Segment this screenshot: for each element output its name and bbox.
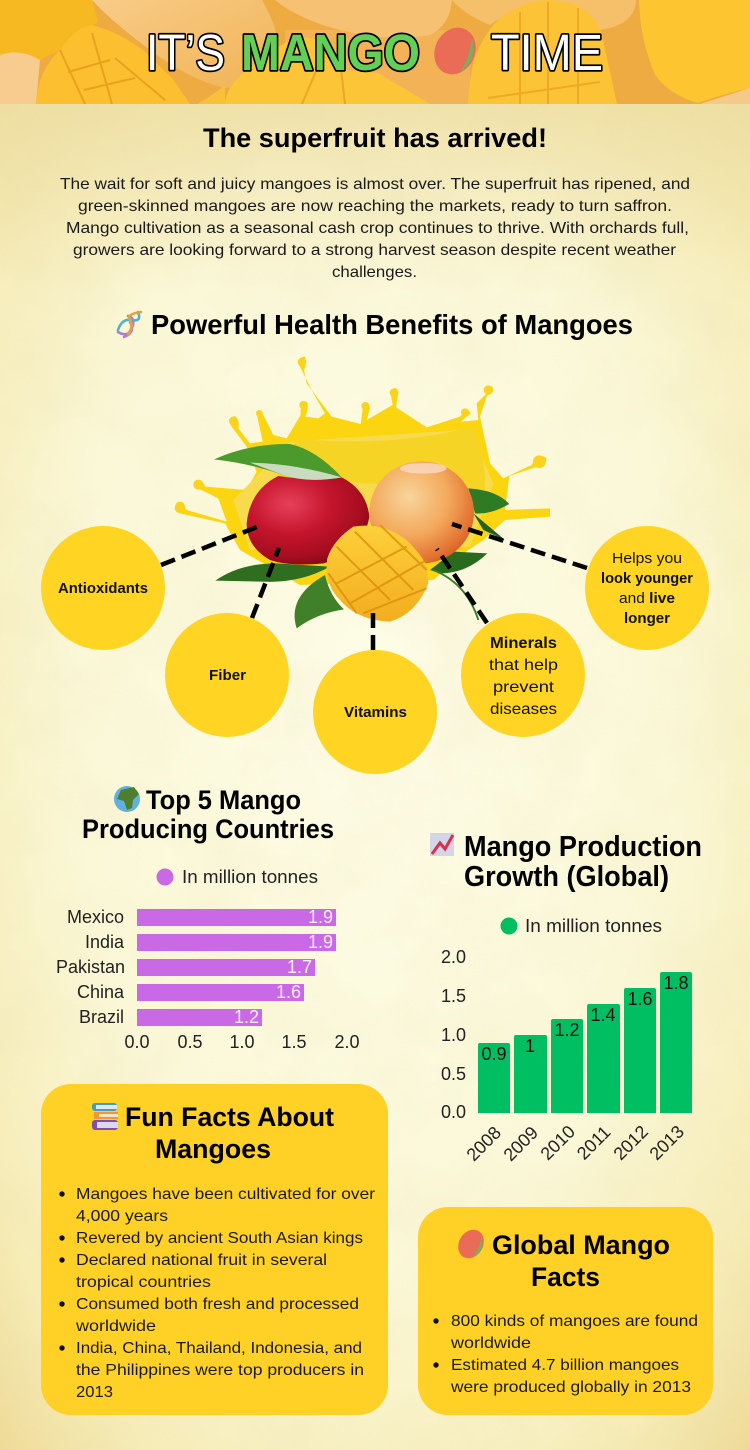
bar chart: top producers: 1.9 xyxy=(308,907,333,927)
bar chart: global growth: 2011 xyxy=(573,1122,615,1164)
bar chart: global growth: 1.2 xyxy=(554,1020,580,1040)
circle: minerals: prevent xyxy=(493,679,555,696)
intro paragraph: The wait for soft and juicy mangoes is almost over. The superfruit has ripened, and xyxy=(60,176,690,193)
cut mango xyxy=(327,525,428,622)
circle: vitamins xyxy=(313,650,437,774)
list: global facts: 800 kinds of mangoes are found xyxy=(451,1313,698,1330)
heading: global facts: Global Mango xyxy=(492,1230,670,1260)
circle: antioxidants: Antioxidants xyxy=(58,581,148,597)
bar chart: global growth: 0.5 xyxy=(441,1064,466,1084)
leaf: bottom xyxy=(295,575,344,628)
bar chart: top producers: 1.2 xyxy=(234,1007,259,1027)
title: MANGO xyxy=(241,24,420,81)
list: global facts: worldwide xyxy=(450,1335,531,1352)
intro paragraph: challenges. xyxy=(332,264,417,281)
heading: top 5 countries: Top 5 Mango xyxy=(146,785,301,815)
circle: look younger: look younger xyxy=(601,571,693,587)
list: fun facts: 4,000 years xyxy=(76,1208,168,1225)
list: global facts xyxy=(433,1313,698,1396)
circle: minerals: that help xyxy=(489,657,558,674)
list: global facts: Estimated 4.7 billion mangoes xyxy=(451,1357,679,1374)
bar chart: global growth: 0.9 xyxy=(481,1044,507,1064)
list: fun facts xyxy=(59,1186,376,1401)
list: fun facts: India, China, Thailand, Indonesia, and xyxy=(76,1340,362,1357)
bar chart: top producers: 0.0 xyxy=(124,1032,150,1052)
bar chart: top producers: 2.0 xyxy=(334,1032,360,1052)
bar chart: top producers: 0.5 xyxy=(177,1032,203,1052)
header banner: mango photo xyxy=(0,0,750,104)
icon: heading mango xyxy=(453,1225,489,1263)
circle: minerals: Minerals xyxy=(490,635,557,652)
legend: growth: In million tonnes xyxy=(525,916,662,936)
leaf: top xyxy=(214,444,342,480)
panel: fun facts xyxy=(41,1084,388,1415)
bar chart: global growth: 1.6 xyxy=(627,989,653,1009)
leaf: lower left xyxy=(215,563,330,582)
bar chart: top producers: 1.7 xyxy=(287,957,312,977)
bar chart: global growth: 2013 xyxy=(646,1122,688,1164)
bar chart: global growth: 2009 xyxy=(500,1123,542,1165)
circle: antioxidants xyxy=(41,526,165,650)
bar chart: global growth: 2012 xyxy=(610,1122,652,1164)
heading: fun facts xyxy=(125,1102,334,1164)
list: fun facts: Declared national fruit in several xyxy=(76,1252,327,1269)
leaf: right xyxy=(468,488,509,514)
circle: minerals: diseases xyxy=(490,701,557,718)
title: TIME xyxy=(491,24,603,81)
icon: DNA xyxy=(118,312,141,337)
list: fun facts: Consumed both fresh and processed xyxy=(76,1296,359,1313)
orange mango xyxy=(369,461,474,563)
bar chart: top producers xyxy=(56,907,360,1052)
title: IT’S xyxy=(146,24,225,81)
icon: books xyxy=(92,1103,118,1130)
bar chart: global growth: 2.0 xyxy=(441,947,466,967)
heading: top 5 countries xyxy=(82,785,334,844)
circle: fiber xyxy=(165,613,289,737)
title xyxy=(146,24,603,81)
intro paragraph: green-skinned mangoes are now reaching the markets, ready to turn saffron. xyxy=(78,198,672,215)
heading: production growth xyxy=(464,831,702,893)
list: fun facts: 2013 xyxy=(76,1384,113,1401)
heading: top 5 countries: Producing Countries xyxy=(82,814,334,844)
bar chart: top producers: 1.9 xyxy=(308,932,333,952)
illustration: mangoes and juice splash xyxy=(175,357,550,628)
list: fun facts: Revered by ancient South Asian kings xyxy=(76,1230,363,1247)
circle: look younger: and live xyxy=(619,591,675,607)
bar chart: global growth: 1.5 xyxy=(441,986,466,1006)
circle: look younger xyxy=(585,526,709,650)
intro paragraph: growers are looking forward to a strong harvest season despite recent weather xyxy=(73,242,677,259)
circle: look younger: Helps you xyxy=(612,551,682,567)
circle: vitamins: Vitamins xyxy=(344,705,407,721)
heading: global facts: Facts xyxy=(531,1262,600,1292)
list: fun facts: the Philippines were top producers in xyxy=(76,1362,364,1379)
connector lines xyxy=(161,524,587,650)
heading: production growth: Growth (Global) xyxy=(464,861,669,893)
bar chart: global growth: 1.4 xyxy=(590,1005,616,1025)
bar chart: global growth: 2010 xyxy=(537,1122,579,1164)
bar chart: top producers: 1.5 xyxy=(281,1032,307,1052)
list: global facts: were produced globally in 2013 xyxy=(450,1379,691,1396)
heading: production growth: Mango Production xyxy=(464,831,702,863)
panel: global facts xyxy=(418,1207,713,1415)
bar chart: global growth: 1.8 xyxy=(663,973,689,993)
bar chart: top producers: China xyxy=(77,982,125,1002)
bar chart: global growth: 2008 xyxy=(463,1123,505,1165)
intro paragraph: Mango cultivation as a seasonal cash crop continues to thrive. With orchards full, xyxy=(66,220,689,237)
circle: fiber: Fiber xyxy=(209,668,246,684)
list: fun facts: Mangoes have been cultivated for over xyxy=(76,1186,376,1203)
legend: countries: In million tonnes xyxy=(182,867,318,887)
heading: fun facts: Fun Facts About xyxy=(125,1102,334,1132)
circle: look younger: longer xyxy=(624,611,670,627)
bar chart: top producers: Pakistan xyxy=(56,957,125,977)
red mango xyxy=(247,476,369,564)
bar chart: top producers: Brazil xyxy=(79,1007,124,1027)
bar chart: global growth: 0.0 xyxy=(441,1102,466,1122)
icon: chart xyxy=(430,833,454,856)
list: fun facts: tropical countries xyxy=(76,1274,211,1291)
heading: health benefits: Powerful Health Benefits of Mangoes xyxy=(151,309,633,340)
heading: fun facts: Mangoes xyxy=(155,1134,271,1164)
icon: title mango xyxy=(427,21,483,81)
bar chart: global growth xyxy=(441,947,692,1165)
heading: the superfruit has arrived: The superfruit has arrived! xyxy=(203,123,547,153)
intro paragraph xyxy=(60,176,690,281)
icon: globe xyxy=(114,786,140,812)
bar chart: top producers: 1.6 xyxy=(276,982,301,1002)
bar chart: global growth: 1.0 xyxy=(441,1025,466,1045)
bar chart: top producers: 1.0 xyxy=(229,1032,255,1052)
bar chart: top producers: Mexico xyxy=(67,907,124,927)
bar chart: top producers: India xyxy=(85,932,125,952)
heading: global facts xyxy=(492,1230,670,1292)
list: fun facts: worldwide xyxy=(75,1318,156,1335)
circle: minerals xyxy=(461,613,585,737)
bar chart: global growth: 1 xyxy=(525,1036,535,1056)
